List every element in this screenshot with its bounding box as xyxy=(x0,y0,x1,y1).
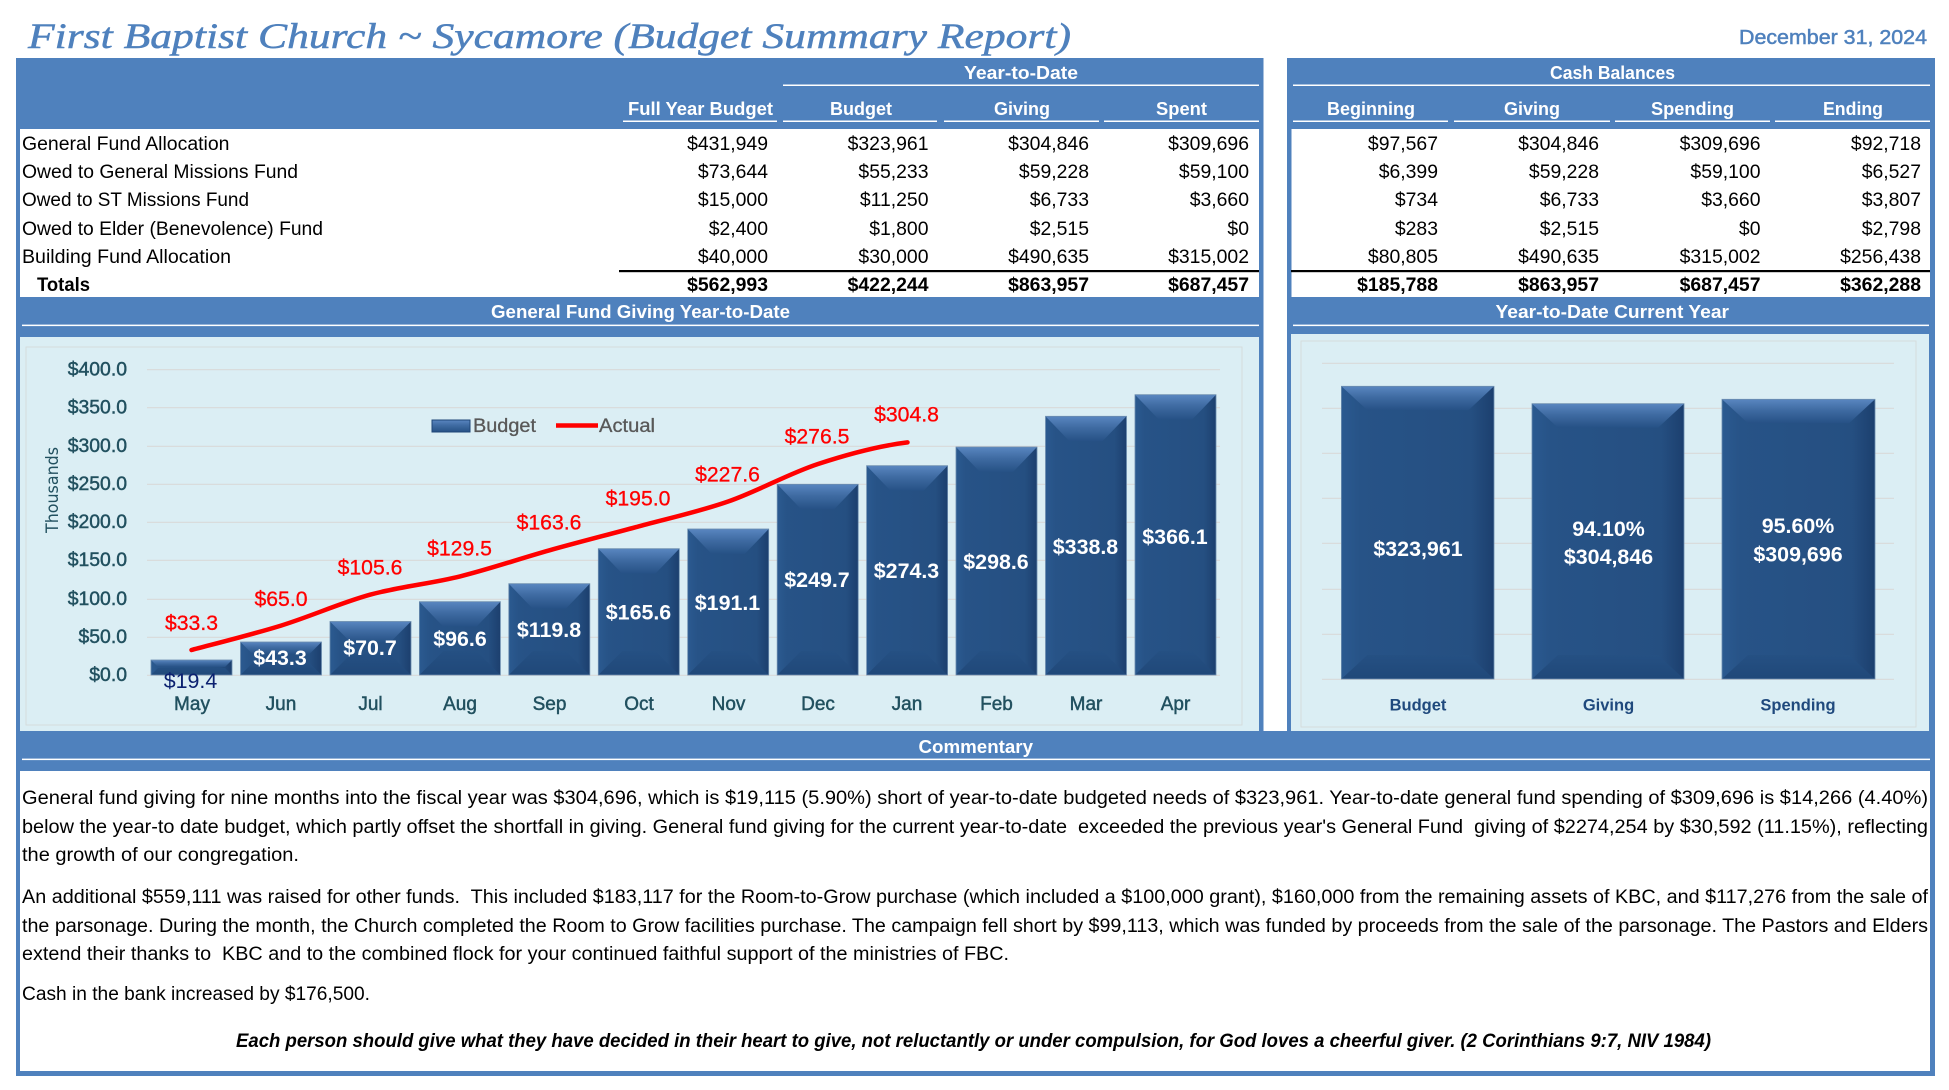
budget bars xyxy=(151,395,1216,675)
bar value labels: $249.7 xyxy=(784,568,850,592)
month labels: Sep xyxy=(533,694,566,715)
bar value labels xyxy=(164,525,1208,693)
column: ytd spent: $0 xyxy=(1227,218,1249,240)
column headings: Spent xyxy=(1156,98,1207,119)
row labels: Owed to Elder (Benevolence) Fund xyxy=(22,219,323,240)
column: spending: $3,660 xyxy=(1701,189,1761,211)
column: full year budget: $40,000 xyxy=(698,246,768,268)
paragraph: general fund xyxy=(22,788,1928,866)
column: spending xyxy=(1680,133,1761,296)
column: beginning: $6,399 xyxy=(1379,161,1438,183)
column: ytd spent xyxy=(1168,133,1249,296)
heading: commentary: Commentary xyxy=(918,736,1034,757)
column: spending: $0 xyxy=(1739,218,1761,240)
actual value labels: $163.6 xyxy=(517,512,581,534)
bar value labels: $119.8 xyxy=(517,618,581,642)
panel: cash balances table xyxy=(1287,58,1935,731)
column: ending: $362,288 xyxy=(1840,274,1921,296)
cash column headings: Giving xyxy=(1504,98,1560,119)
heading: general fund giving: General Fund Giving Year-to-Date xyxy=(491,301,790,322)
paragraph: general fund: the growth of our congregation. xyxy=(22,845,299,866)
scripture quote: Each person should give what they have decided in their heart to give, not reluctantly or under compulsion, for God loves a cheerful giver. (2 Corinthians 9:7, NIV 1984) xyxy=(236,1031,1711,1052)
bar: spending xyxy=(1722,399,1875,679)
y axis labels: $100.0 xyxy=(68,588,127,610)
bar labels: 95.60% xyxy=(1762,514,1834,538)
column: giving: $59,228 xyxy=(1529,161,1599,183)
y axis labels: $150.0 xyxy=(68,549,127,571)
cash column headings: Beginning xyxy=(1327,98,1415,119)
month labels: Mar xyxy=(1070,694,1103,715)
column: beginning xyxy=(1357,133,1438,296)
month labels: Apr xyxy=(1161,694,1191,715)
column: ytd giving: $304,846 xyxy=(1008,133,1089,155)
report date: December 31, 2024 xyxy=(1739,27,1927,49)
y axis labels: $0.0 xyxy=(89,664,127,686)
column: beginning: $283 xyxy=(1395,218,1438,240)
column: full year budget: $15,000 xyxy=(698,189,768,211)
month labels: Nov xyxy=(712,694,746,715)
bar: giving xyxy=(1532,404,1684,679)
column: giving: $2,515 xyxy=(1540,218,1599,240)
actual value labels: $195.0 xyxy=(606,488,670,510)
y axis labels: $200.0 xyxy=(68,511,127,533)
cash column headings xyxy=(1327,98,1883,119)
column: ending: $3,807 xyxy=(1862,189,1921,211)
column: ytd spent: $59,100 xyxy=(1179,161,1249,183)
row labels: Owed to ST Missions Fund xyxy=(22,190,249,211)
paragraph: cash in bank: Cash in the bank increased by $176,500. xyxy=(22,984,370,1005)
panel: commentary xyxy=(16,731,1935,1076)
column: ytd giving: $490,635 xyxy=(1008,246,1089,268)
actual value labels: $33.3 xyxy=(165,612,218,635)
column: full year budget: $2,400 xyxy=(709,218,768,240)
row labels: Building Fund Allocation xyxy=(22,247,231,268)
paragraph: general fund: General fund giving for nine months into the fiscal year was $304,696, which is $19,115 (5.90%) short of year-to-date budgeted needs of $323,961. Year-to-date general fund spending of $309,696 is $14,266 (4.40%) xyxy=(22,788,1928,809)
column headings: Giving xyxy=(994,98,1050,119)
month labels: Aug xyxy=(443,694,477,715)
column: ytd giving: $59,228 xyxy=(1019,161,1089,183)
y axis labels: $350.0 xyxy=(68,396,127,418)
column: ytd spent: $687,457 xyxy=(1168,274,1249,296)
column: ending: $92,718 xyxy=(1851,133,1921,155)
actual value labels: $227.6 xyxy=(695,464,760,486)
legend: Actual xyxy=(599,416,655,437)
column: spending: $59,100 xyxy=(1690,161,1761,183)
month labels: Jul xyxy=(358,694,383,715)
bar value labels: $43.3 xyxy=(253,646,307,670)
column: ytd budget: $11,250 xyxy=(860,189,929,211)
bar value labels: $338.8 xyxy=(1053,535,1118,559)
column: spending: $687,457 xyxy=(1680,274,1760,296)
legend: Budget xyxy=(473,416,537,437)
paragraph: other funds: An additional $559,111 was raised for other funds. This included $183,117 for the Room-to-Grow purchase (which included a $100,000 grant), $160,000 from the remaining assets of KBC, and $117,276 from the sale of xyxy=(22,887,1929,908)
column: ending xyxy=(1840,133,1921,296)
cash column headings: Spending xyxy=(1651,98,1734,119)
column: giving: $304,846 xyxy=(1518,133,1599,155)
column: giving: $490,635 xyxy=(1518,246,1599,268)
month labels: May xyxy=(174,694,210,715)
bar labels xyxy=(1373,514,1843,569)
y axis labels: $250.0 xyxy=(68,473,127,495)
column: ytd spent: $315,002 xyxy=(1168,246,1249,268)
legend xyxy=(432,416,655,437)
row labels: Owed to General Missions Fund xyxy=(22,162,298,183)
row labels xyxy=(22,134,323,296)
bar value labels: $19.4 xyxy=(164,669,217,693)
column: ytd budget: $30,000 xyxy=(858,246,929,268)
month labels: Oct xyxy=(624,694,654,715)
column: full year budget: $73,644 xyxy=(698,161,768,183)
column: beginning: $97,567 xyxy=(1368,133,1438,155)
y axis title: Thousands xyxy=(43,447,63,534)
actual value labels: $105.6 xyxy=(338,556,402,580)
bar value labels: $298.6 xyxy=(963,550,1029,574)
bar value labels: $165.6 xyxy=(606,600,671,624)
column: ytd giving: $863,957 xyxy=(1008,274,1089,296)
chart: year-to-date current year xyxy=(1291,334,1929,731)
column: ytd budget: $323,961 xyxy=(848,133,928,155)
column: ytd budget: $1,800 xyxy=(869,218,929,240)
month labels: Feb xyxy=(980,694,1013,715)
actual value labels: $276.5 xyxy=(785,426,849,448)
bar value labels: $274.3 xyxy=(874,559,939,583)
column: giving xyxy=(1518,133,1599,296)
paragraph: other funds xyxy=(22,887,1929,965)
y axis labels: $50.0 xyxy=(78,626,127,648)
bar value labels: $191.1 xyxy=(695,591,760,615)
bar value labels: $70.7 xyxy=(343,636,397,660)
column headings xyxy=(628,98,1207,119)
row labels: Totals xyxy=(37,275,90,296)
category labels: Spending xyxy=(1760,696,1836,714)
column: spending: $315,002 xyxy=(1680,246,1760,268)
column: ending: $2,798 xyxy=(1862,218,1921,240)
paragraph: other funds: the parsonage. During the month, the Church completed the Room to Grow facilities purchase. The campaign fell short by $99,113, which was funded by proceeds from the sale of the parsonage. The Pastors and Elders xyxy=(22,916,1928,937)
column: full year budget xyxy=(687,133,768,296)
column headings: Budget xyxy=(830,98,892,119)
bar value labels: $366.1 xyxy=(1142,525,1208,549)
column: beginning: $185,788 xyxy=(1357,274,1438,296)
bar labels: $309,696 xyxy=(1753,542,1843,566)
column: ytd budget: $55,233 xyxy=(858,161,928,183)
column headings: Full Year Budget xyxy=(628,98,773,119)
actual value labels: $304.8 xyxy=(874,404,939,426)
y axis labels xyxy=(68,358,127,686)
paragraph: other funds: extend their thanks to KBC and to the combined flock for your continued faithful support of the ministries of FBC. xyxy=(22,944,1009,965)
column: beginning: $734 xyxy=(1395,189,1438,211)
column: ytd spent: $3,660 xyxy=(1190,189,1249,211)
bar value labels: $96.6 xyxy=(433,627,487,651)
column: full year budget: $431,949 xyxy=(687,133,768,155)
column: ending: $256,438 xyxy=(1840,246,1921,268)
column: giving: $863,957 xyxy=(1518,274,1599,296)
category labels: Budget xyxy=(1390,696,1447,714)
heading: year-to-date current year: Year-to-Date Current Year xyxy=(1496,301,1729,322)
actual value labels: $129.5 xyxy=(427,538,492,560)
paragraph: general fund: below the year-to date budget, which partly offset the shortfall in giving. General fund giving for the current year-to-date exceeded the previous year's General Fund giving of $2274,254 by $30,592 (11.15%), reflecting xyxy=(22,817,1928,838)
category labels: Giving xyxy=(1583,696,1634,714)
column: ytd giving: $2,515 xyxy=(1030,218,1089,240)
y axis labels: $400.0 xyxy=(68,358,127,380)
column: full year budget: $562,993 xyxy=(687,274,768,296)
column: ytd spent: $309,696 xyxy=(1168,133,1249,155)
category labels xyxy=(1390,696,1836,714)
actual value labels xyxy=(165,404,939,635)
column: ytd budget xyxy=(848,133,929,296)
actual giving line xyxy=(192,442,908,650)
column: giving: $6,733 xyxy=(1540,189,1599,211)
month labels xyxy=(174,694,1191,715)
column: ytd giving xyxy=(1008,133,1089,296)
column: beginning: $80,805 xyxy=(1368,246,1438,268)
column: ytd giving: $6,733 xyxy=(1030,189,1089,211)
bar: budget xyxy=(1341,386,1494,679)
month labels: Jan xyxy=(892,694,922,715)
panel: budget table xyxy=(16,58,1264,731)
row labels: General Fund Allocation xyxy=(22,134,230,155)
y axis labels: $300.0 xyxy=(68,435,127,457)
bar labels: 94.10% xyxy=(1572,517,1645,541)
month labels: Jun xyxy=(266,694,296,715)
column: ytd budget: $422,244 xyxy=(848,274,929,296)
heading: year-to-date: Year-to-Date xyxy=(964,62,1078,83)
bar labels: $304,846 xyxy=(1564,545,1653,569)
heading: cash balances: Cash Balances xyxy=(1550,62,1675,83)
column: ending: $6,527 xyxy=(1862,161,1921,183)
chart: general fund giving year-to-date xyxy=(20,337,1259,731)
month labels: Dec xyxy=(801,694,835,715)
column: spending: $309,696 xyxy=(1680,133,1760,155)
bar labels: $323,961 xyxy=(1373,537,1463,561)
cash column headings: Ending xyxy=(1823,98,1883,119)
title: First Baptist Church ~ Sycamore (Budget Summary Report) xyxy=(27,16,1071,56)
actual value labels: $65.0 xyxy=(254,588,308,611)
